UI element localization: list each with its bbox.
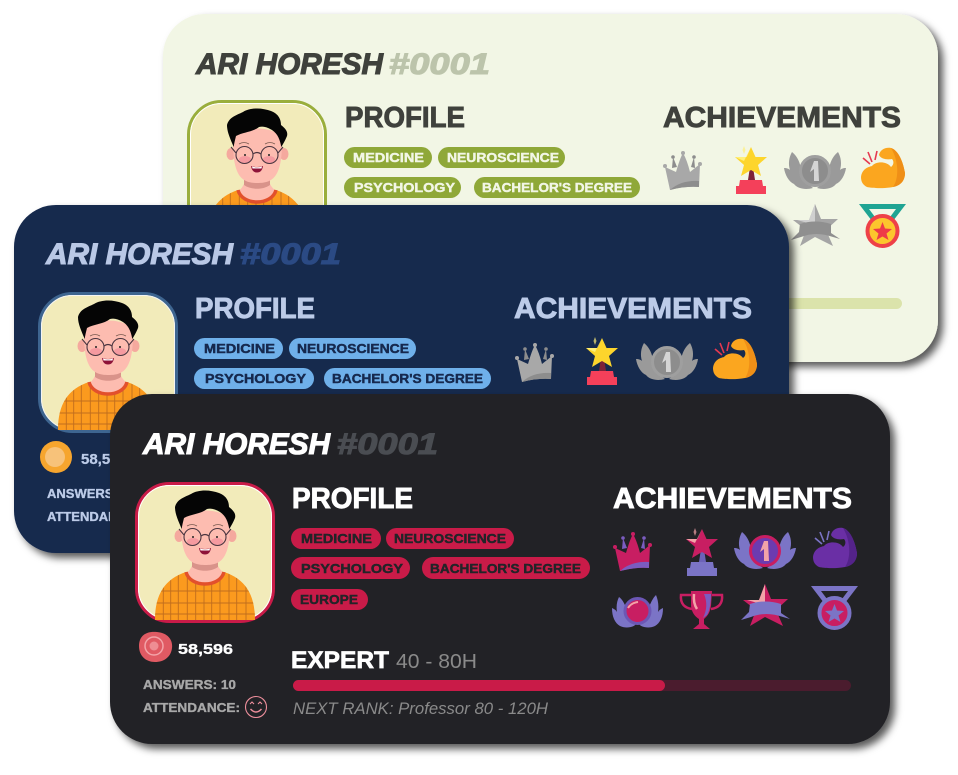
icon: star trophy [686,528,718,576]
icon: grey crown [515,343,554,382]
coin: navy card [40,441,72,473]
heading: achievements light: ACHIEVEMENTS [663,102,901,134]
title: navy card: #0001 [240,238,341,271]
heading: achievements dark: ACHIEVEMENTS [613,483,852,515]
icon: smiley [246,696,266,718]
points: dark card: 58,596 [178,641,233,658]
icon: grey winged number one [636,343,698,380]
icon: trophy cup [681,591,722,629]
title: navy card [45,238,341,271]
answers: navy card: ANSWERS: 10 [47,486,136,501]
icon: grey winged number one [784,152,846,189]
tags: light card: NEUROSCIENCE [447,150,559,165]
rank label: EXPERT [291,647,389,674]
icon: star trophy [586,337,618,385]
avatar: dark card [136,484,274,622]
icon: winged number one [734,532,796,569]
tags: navy card: NEUROSCIENCE [297,341,409,356]
progress bar: dark card [293,680,851,691]
tags: dark card: NEUROSCIENCE [394,531,506,546]
card: light green profile [163,14,938,362]
tags: dark card [291,528,590,610]
icon: medal [859,204,906,246]
icon: flexed muscle [813,528,857,568]
tags: navy card: MEDICINE [204,341,275,356]
tags: dark card: BACHELOR'S DEGREE [430,561,581,576]
tags: navy card: BACHELOR'S DEGREE [332,371,483,386]
tags: light card: MEDICINE [353,150,424,165]
heading: achievements navy: ACHIEVEMENTS [514,293,752,325]
coin: dark card [139,632,172,662]
icon: grey ribbon star [791,204,840,246]
title: dark card: #0001 [337,428,438,461]
title: light card [195,48,490,81]
icon: grey crown [663,151,702,190]
icon: flexed muscle [713,339,757,379]
heading: profile dark: PROFILE [292,483,413,515]
rank range: 40 - 80H [396,651,477,673]
icon: winged badge [612,595,663,627]
tags: dark card: MEDICINE [301,531,372,546]
tags: dark card: PSYCHOLOGY [301,561,403,576]
attendance: navy card: ATTENDANCE: [47,509,140,524]
icon: ribbon star [741,584,790,626]
icon: flexed muscle [861,148,905,188]
title: dark card [142,428,438,461]
title: light card: ARI HORESH [195,48,384,81]
heading: profile navy: PROFILE [195,293,315,325]
title: light card: #0001 [389,48,490,81]
next rank text: NEXT RANK: Professor 80 - 120H [293,699,549,718]
title: dark card: ARI HORESH [142,428,331,461]
icon: crown [613,532,652,571]
tags: navy card: PSYCHOLOGY [205,371,306,386]
icon: medal [811,586,858,628]
tags: light card [344,147,640,198]
tags: light card: BACHELOR'S DEGREE [482,180,632,195]
heading: profile light: PROFILE [345,102,465,134]
card: dark profile [110,394,890,744]
tags: dark card: EUROPE [300,592,358,607]
attendance: dark card: ATTENDANCE: [143,700,240,715]
tags: navy card [194,338,491,389]
tags: light card: PSYCHOLOGY [354,180,455,195]
card: navy profile [14,205,789,553]
avatar: navy card [40,294,176,432]
avatar: light card [188,102,326,240]
points: navy card: 58,596 [81,451,127,468]
progress bar: light card [340,298,902,309]
icon: star trophy [735,146,767,194]
title: navy card: ARI HORESH [45,238,234,271]
answers: dark card: ANSWERS: 10 [143,677,236,692]
